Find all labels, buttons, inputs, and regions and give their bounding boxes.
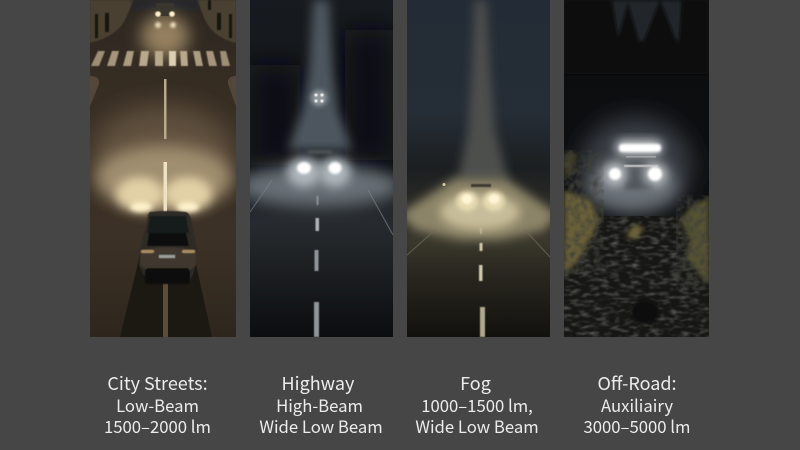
caption: off-road: Auxiliairy <box>601 393 673 417</box>
sky gap and pines <box>610 0 682 42</box>
wide beam <box>237 165 401 207</box>
fog lane dashes <box>479 228 485 337</box>
crosswalk <box>91 51 230 66</box>
far glow <box>141 14 189 58</box>
caption: city streets: Low-Beam <box>116 393 199 417</box>
fog beam column <box>458 0 508 180</box>
auxiliary lights <box>603 162 627 186</box>
main beam glow <box>90 97 236 178</box>
fog light glow <box>440 194 520 230</box>
vegetation texture <box>564 150 604 275</box>
fog road edges <box>407 233 432 256</box>
center line <box>164 79 166 139</box>
headlight glow <box>287 157 321 187</box>
far car <box>156 3 174 16</box>
caption: city streets: City Streets: <box>107 370 208 396</box>
caption: off-road: 3000–5000 lm <box>584 414 690 438</box>
photo panels <box>90 0 709 337</box>
caption: fog: 1000–1500 lm, <box>421 393 533 417</box>
beam column <box>288 0 352 150</box>
light bar glow <box>616 140 662 155</box>
wide fog beam <box>400 178 557 240</box>
caption: fog <box>415 370 539 438</box>
car shadow <box>120 255 212 337</box>
car <box>139 211 197 284</box>
panel: fog <box>400 0 557 337</box>
tree silhouettes <box>250 30 393 165</box>
far car lights <box>311 90 327 106</box>
caption: highway: Highway <box>282 370 354 396</box>
lane dashes <box>314 196 319 337</box>
sidewalks <box>90 0 134 43</box>
trail <box>602 216 676 230</box>
vegetation <box>564 152 709 285</box>
panel: highway high-beam <box>250 0 393 337</box>
panel: city streets low-beam <box>90 0 236 337</box>
pedestrians <box>95 0 232 38</box>
caption: city streets <box>104 370 211 438</box>
caption: city streets: 1500–2000 lm <box>104 414 211 438</box>
caption: highway: High-Beam <box>276 393 363 417</box>
caption: fog: Fog <box>460 370 491 396</box>
road edges <box>250 180 272 212</box>
panel: off-road auxiliary <box>564 0 709 337</box>
caption: off-road <box>584 370 690 438</box>
caption: fog: Wide Low Beam <box>415 414 539 438</box>
caption: highway: Wide Low Beam <box>259 414 383 438</box>
fog halo <box>581 117 691 213</box>
caption: highway <box>259 370 383 438</box>
caption: off-road: Off-Road: <box>597 370 677 396</box>
